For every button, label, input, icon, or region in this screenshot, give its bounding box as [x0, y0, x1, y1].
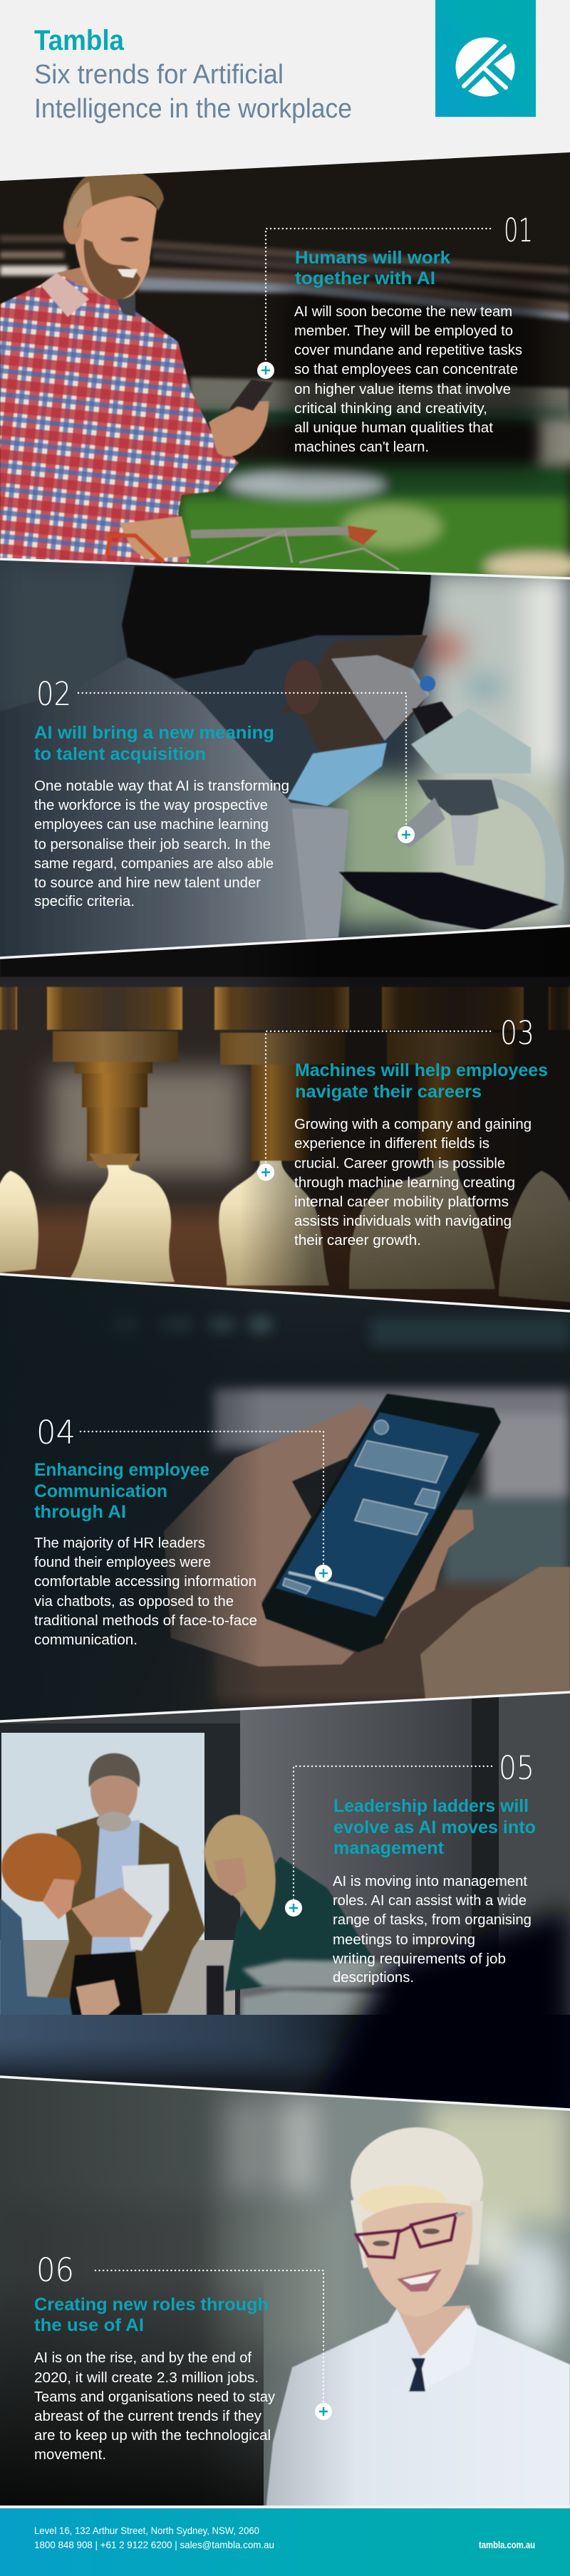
dotted connector: [95, 2270, 323, 2402]
number 06: 06: [36, 2251, 74, 2289]
footer address and contacts: Level 16, 132 Arthur Street, North Sydney, NSW, 2060: [34, 2525, 259, 2536]
body text: writing requirements of job: [332, 1951, 506, 1967]
heading: Communication: [34, 1481, 167, 1501]
icon: plus marker: [257, 362, 274, 379]
heading: together with AI: [295, 268, 435, 288]
heading: the use of AI: [34, 2315, 144, 2335]
body text: their career growth.: [294, 1233, 421, 1248]
dotted connector: [266, 1031, 490, 1162]
subtitle: [34, 60, 352, 124]
subtitle: Intelligence in the workplace: [34, 94, 352, 124]
number 03: 03: [500, 1014, 534, 1052]
icon: plus marker: [257, 1164, 274, 1181]
body text: descriptions.: [333, 1970, 414, 1986]
number 01: 01: [504, 212, 533, 249]
icon: plus marker: [398, 826, 415, 843]
heading: [333, 1796, 536, 1858]
body text: [34, 2350, 275, 2463]
heading: Leadership ladders will: [333, 1796, 529, 1816]
body text: through machine learning creating: [294, 1175, 515, 1191]
body text: crucial. Career growth is possible: [294, 1156, 505, 1172]
heading: through AI: [34, 1502, 126, 1522]
body text: The majority of HR leaders: [34, 1535, 205, 1551]
panel: section 4, communication: [0, 1271, 570, 1727]
footer address and contacts: [34, 2525, 274, 2550]
body text: meetings to improving: [333, 1932, 475, 1948]
subtitle: Six trends for Artificial: [34, 60, 284, 90]
body text: machines can't learn.: [294, 439, 429, 455]
heading: to talent acquisition: [34, 744, 206, 764]
body text: communication.: [34, 1632, 138, 1648]
body text: member. They will be employed to: [294, 323, 513, 339]
photo: supermarket background: [0, 142, 570, 584]
heading: navigate their careers: [295, 1082, 482, 1102]
body text: so that employees can concentrate: [294, 362, 518, 377]
body text: assists individuals with navigating: [294, 1214, 512, 1229]
icon: plus marker: [315, 2403, 332, 2420]
body text: [34, 778, 289, 909]
body text: on higher value items that involve: [294, 382, 511, 397]
body text: comfortable accessing information: [34, 1574, 256, 1590]
dark shadow, lower right: [306, 1909, 570, 2115]
heading: Enhancing employee: [34, 1460, 209, 1480]
body text: AI will soon become the new team: [294, 304, 512, 320]
photo: smiling woman in hairnet and white coat: [266, 2127, 570, 2510]
number 04: 04: [36, 1414, 76, 1451]
photo: man in plaid shirt with phone: [0, 166, 399, 570]
body text: to source and hire new talent under: [34, 875, 261, 891]
icon: Tambla logo: [435, 0, 536, 117]
number 05: 05: [499, 1749, 534, 1787]
dark gradient overlay: [0, 1271, 570, 1727]
body text: all unique human qualities that: [294, 420, 493, 436]
body text: AI is on the rise, and by the end of: [34, 2350, 252, 2366]
heading: Humans will work: [295, 248, 450, 268]
body text: are to keep up with the technological: [34, 2428, 271, 2444]
heading: evolve as AI moves into: [333, 1818, 536, 1837]
body text: One notable way that AI is transforming: [34, 778, 289, 794]
heading: [34, 2295, 269, 2335]
body text: traditional methods of face-to-face: [34, 1613, 257, 1629]
photo: blurred office background: [0, 1271, 570, 1727]
body text: experience in different fields is: [294, 1136, 489, 1152]
body text: to personalise their job search. In the: [34, 837, 271, 852]
panel: section 6, new roles: [0, 2072, 570, 2510]
body text: Growing with a company and gaining: [294, 1117, 532, 1132]
body text: specific criteria.: [34, 894, 135, 909]
heading: management: [333, 1838, 445, 1858]
photo: lab background: [0, 556, 570, 961]
body text: critical thinking and creativity,: [294, 401, 487, 417]
panel: section 3, careers: [0, 922, 570, 1318]
icon: plus marker: [285, 1899, 302, 1917]
photo: 3D printer nozzles: [0, 922, 570, 1318]
dotted connector: [294, 1766, 492, 1900]
footer website: tambla.com.au: [479, 2539, 535, 2550]
body text: range of tasks, from organising: [333, 1912, 532, 1928]
footer panel: [0, 2505, 570, 2576]
body text: roles. AI can assist with a wide: [333, 1893, 527, 1909]
body text: abreast of the current trends if they: [34, 2409, 261, 2424]
number 02: 02: [36, 675, 71, 713]
dotted connector: [81, 1432, 323, 1565]
photo: hand holding phone with chatbot: [164, 1394, 570, 1699]
body text: AI is moving into management: [333, 1874, 527, 1889]
panel: section 2, talent acquisition: [0, 556, 570, 961]
body text: same regard, companies are also able: [34, 856, 274, 872]
body text: [332, 1874, 532, 1986]
body text: [34, 1535, 257, 1648]
photo: blurred factory background: [0, 2072, 570, 2510]
panel: section 1, humans: [0, 142, 570, 584]
body text: employees can use machine learning: [34, 817, 269, 833]
body text: internal career mobility platforms: [294, 1194, 509, 1210]
footer address and contacts: 1800 848 908 | +61 2 9122 6200 | sales@tambla.com.au: [34, 2539, 274, 2550]
heading: [295, 248, 450, 288]
body text: movement.: [34, 2447, 106, 2463]
dark text backdrop: [285, 285, 542, 470]
photo: scientist at microscope: [0, 566, 559, 961]
body text: cover mundane and repetitive tasks: [294, 343, 522, 358]
section divider lines: [0, 559, 570, 2110]
body text: Teams and organisations need to stay: [34, 2389, 275, 2405]
heading: AI will bring a new meaning: [34, 723, 274, 743]
heading: [34, 1460, 209, 1522]
heading: [34, 723, 274, 764]
header panel: [34, 0, 536, 123]
body text: via chatbots, as opposed to the: [34, 1594, 234, 1610]
heading: Creating new roles through: [34, 2295, 269, 2315]
dotted connector: [266, 229, 490, 363]
panel: section 5, leadership: [0, 1688, 570, 2115]
dotted connector: [78, 693, 406, 826]
photo: office meeting with three people: [0, 1688, 570, 2115]
heading: [295, 1060, 548, 1102]
heading: Machines will help employees: [295, 1060, 548, 1080]
body text: found their employees were: [34, 1555, 211, 1570]
icon: plus marker: [315, 1565, 332, 1582]
body text: [294, 1117, 532, 1248]
title: Tambla: Tambla: [34, 25, 125, 56]
body text: 2020, it will create 2.3 million jobs.: [34, 2370, 259, 2386]
body text: the workforce is the way prospective: [34, 798, 268, 813]
body text: [294, 304, 522, 455]
